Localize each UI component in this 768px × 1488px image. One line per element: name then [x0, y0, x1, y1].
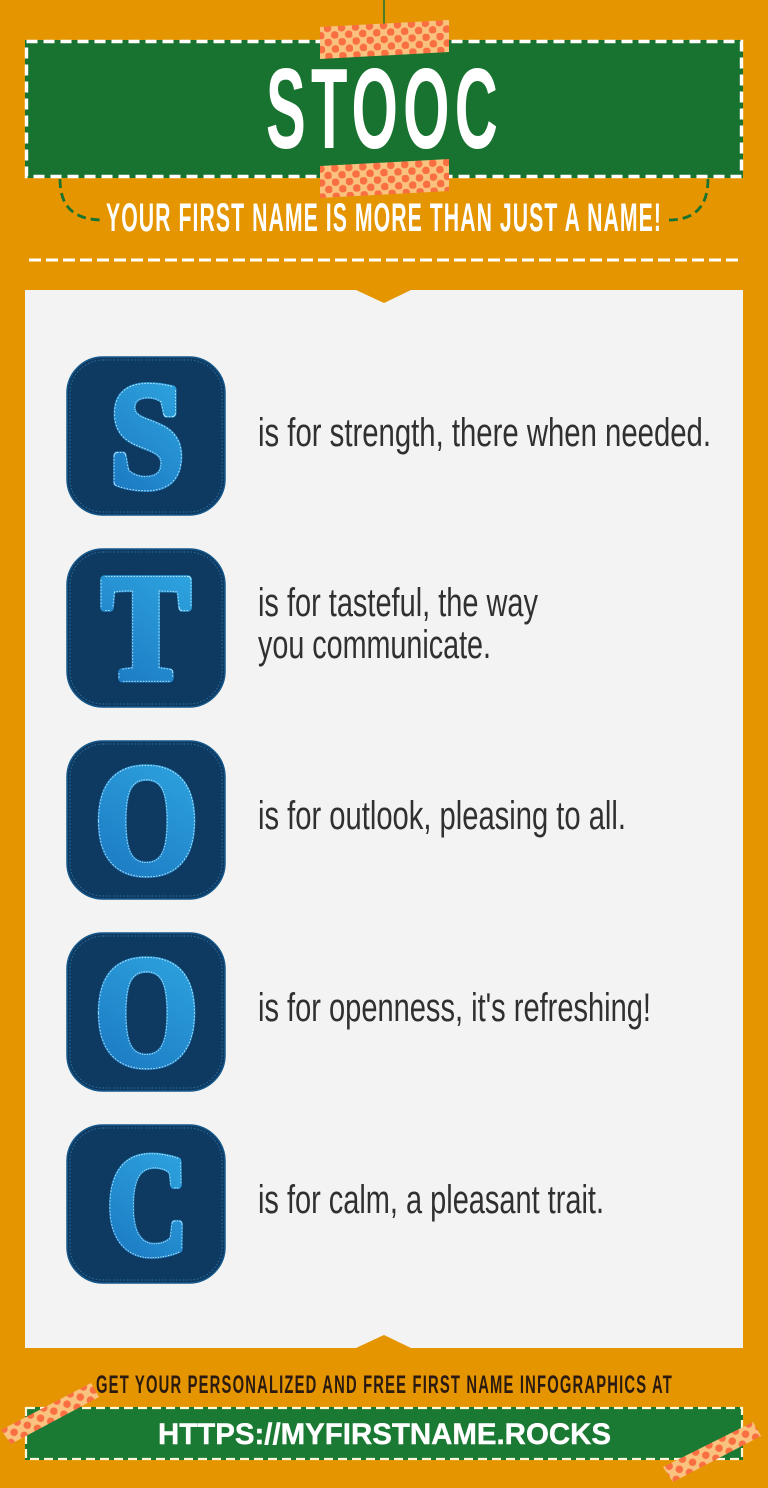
footer banner	[25, 1407, 743, 1460]
row: O second	[67, 925, 651, 1098]
icon: letter O second: O	[95, 925, 198, 1098]
icon: letter O: O	[95, 733, 198, 906]
tape: footer left	[1, 1383, 99, 1444]
icon: letter S: S	[110, 353, 184, 519]
title: STOOC	[266, 46, 503, 173]
icon: letter T: T	[102, 545, 190, 711]
icon: letter C: C	[107, 1125, 188, 1285]
tape: footer right	[663, 1422, 761, 1482]
footer url: HTTPS://MYFIRSTNAME.ROCKS	[158, 1418, 611, 1451]
icon: letter O second: O	[95, 925, 198, 1098]
icon: letter O: O	[95, 733, 198, 906]
icon: letter O second: O	[95, 925, 198, 1098]
icon: letter S: S	[110, 353, 184, 519]
icon: letter O: O	[95, 733, 198, 906]
bracket: left	[60, 179, 103, 220]
icon: letter T: T	[102, 545, 190, 711]
icon: letter S: S	[110, 353, 184, 519]
panel: letters	[25, 290, 743, 1348]
icon: letter C	[67, 1125, 225, 1285]
row: S	[67, 353, 711, 519]
icon: letter C: C	[107, 1125, 188, 1285]
bracket: right	[669, 179, 708, 220]
row: T	[67, 545, 538, 711]
header thread	[383, 0, 385, 25]
text: T	[258, 581, 538, 667]
icon: letter T	[67, 545, 225, 711]
divider	[29, 258, 738, 262]
text: O: is for outlook, pleasing to all.	[258, 794, 626, 838]
tape: top	[320, 20, 449, 59]
tape: bottom	[320, 159, 449, 198]
icon: letter T: T	[102, 545, 190, 711]
row: C	[67, 1125, 604, 1285]
row: O	[67, 733, 626, 906]
text: T: you communicate.	[258, 623, 491, 667]
text: T: is for tasteful, the way	[258, 581, 538, 625]
icon: letter S	[67, 353, 225, 519]
title banner	[25, 40, 743, 178]
icon: letter C: C	[107, 1125, 188, 1285]
text: C: is for calm, a pleasant trait.	[258, 1178, 604, 1222]
